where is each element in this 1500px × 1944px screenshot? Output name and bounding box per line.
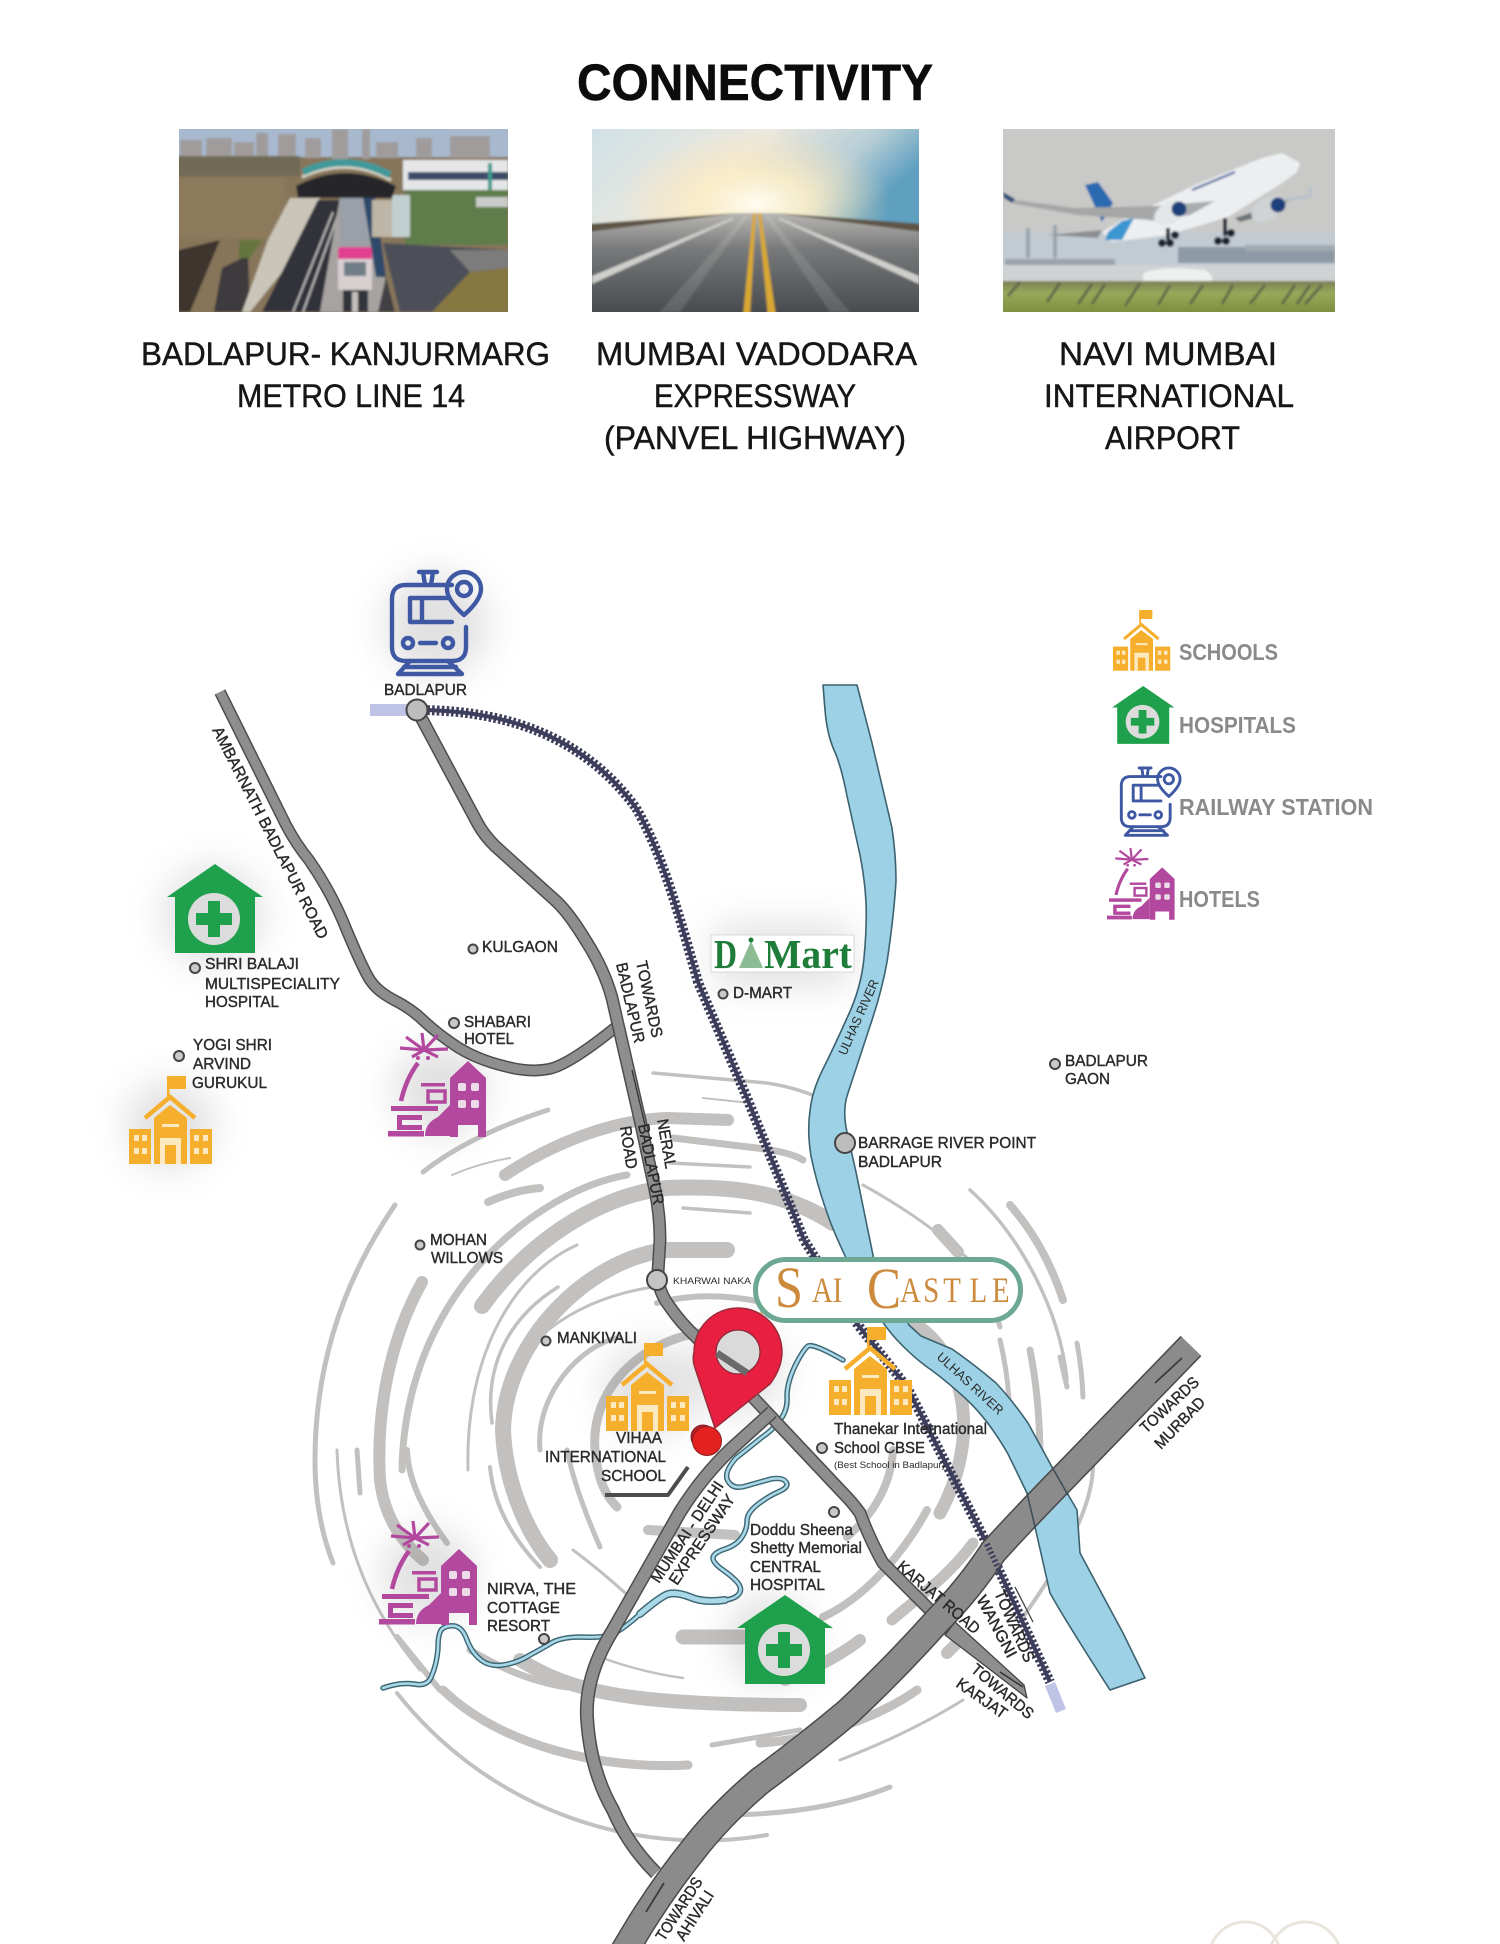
label: nirva cottage resort: COTTAGE bbox=[487, 1600, 560, 1617]
label: shri balaji hospital bbox=[190, 956, 340, 1011]
badge: sai castle bbox=[756, 1255, 1020, 1321]
label: central hospital: HOSPITAL bbox=[750, 1577, 825, 1594]
label: thanekar international school bbox=[817, 1421, 987, 1471]
label: mankivali: MANKIVALI bbox=[557, 1330, 637, 1347]
legend: schools: SCHOOLS bbox=[1179, 639, 1278, 665]
label: towards ahivali: AHIVALI bbox=[673, 1888, 718, 1944]
icon: vihaa school bbox=[606, 1343, 689, 1431]
label: shri balaji hospital: HOSPITAL bbox=[205, 994, 279, 1011]
road label: mumbai delhi expressway: MUMBAI - DELHI bbox=[648, 1478, 727, 1586]
icon: central hospital bbox=[737, 1595, 833, 1684]
legend: hospitals: HOSPITALS bbox=[1179, 712, 1296, 738]
label: mohan willows bbox=[416, 1232, 503, 1267]
road label: neral badlapur road: NERAL bbox=[653, 1118, 679, 1170]
river label: ulhas lower: ULHAS RIVER bbox=[934, 1349, 1007, 1418]
label: kharwai naka: KHARWAI NAKA bbox=[673, 1276, 752, 1287]
label: yogi shri arvind gurukul: GURUKUL bbox=[192, 1075, 267, 1092]
logo: dmart: D bbox=[714, 931, 737, 977]
road label: neral badlapur road bbox=[616, 1118, 679, 1206]
legend: railway station: RAILWAY STATION bbox=[1179, 794, 1373, 820]
label: vihaa international school bbox=[545, 1430, 666, 1485]
logo: dmart bbox=[711, 931, 854, 977]
label: vihaa international school: INTERNATIONAL bbox=[545, 1449, 666, 1466]
road label: towards badlapur bbox=[612, 959, 665, 1045]
caption: expressway bbox=[596, 336, 918, 456]
label: thanekar international school: Thanekar International bbox=[834, 1421, 987, 1438]
label: shri balaji hospital: SHRI BALAJI bbox=[205, 956, 299, 973]
legend: hotels bbox=[1107, 848, 1260, 920]
node: badlapur station bbox=[406, 700, 428, 720]
label: central hospital: Shetty Memorial bbox=[750, 1540, 862, 1557]
caption: airport: AIRPORT bbox=[1105, 420, 1240, 456]
label: central hospital: CENTRAL bbox=[750, 1559, 821, 1576]
label: towards wangni: TOWARDS bbox=[990, 1588, 1037, 1665]
label: towards murbad: TOWARDS bbox=[1137, 1374, 1203, 1437]
badge: sai castle: S bbox=[775, 1255, 803, 1320]
road label: karjat road: KARJAT ROAD bbox=[893, 1558, 983, 1638]
road label: neral badlapur road: ROAD bbox=[616, 1125, 640, 1170]
icon: shabari hotel bbox=[388, 1033, 486, 1137]
label: d-mart: D-MART bbox=[733, 985, 792, 1002]
node: barrage river point bbox=[835, 1133, 855, 1153]
label: badlapur: BADLAPUR bbox=[384, 682, 467, 699]
label: central hospital bbox=[750, 1507, 862, 1594]
label: shri balaji hospital: MULTISPECIALITY bbox=[205, 976, 340, 993]
road: neral badlapur and karjat road bbox=[417, 710, 1027, 1698]
label: towards karjat: KARJAT bbox=[953, 1675, 1010, 1723]
label: nirva cottage resort: RESORT bbox=[487, 1618, 550, 1635]
railway line ends bbox=[370, 704, 1066, 1713]
label: towards wangni bbox=[972, 1588, 1037, 1665]
label: kulgaon: KULGAON bbox=[482, 939, 558, 956]
ulhas river bbox=[809, 685, 1145, 1690]
title: CONNECTIVITY bbox=[577, 54, 933, 111]
label: towards karjat: TOWARDS bbox=[967, 1661, 1037, 1723]
legend: hospitals bbox=[1112, 686, 1296, 744]
small creek bbox=[383, 1346, 843, 1688]
caption: metro line: BADLAPUR- KANJURMARG bbox=[141, 336, 550, 372]
decorative corner rings bbox=[1209, 1922, 1341, 1944]
label: towards ahivali: TOWARDS bbox=[653, 1875, 707, 1944]
caption: metro line: METRO LINE 14 bbox=[237, 378, 465, 414]
road: mumbai delhi expressway bbox=[587, 1412, 772, 1873]
legend: railway station bbox=[1121, 768, 1373, 835]
label: mohan willows: MOHAN bbox=[430, 1232, 487, 1249]
badge: sai castle: AI bbox=[812, 1271, 842, 1311]
icon: yogi shri gurukul school bbox=[129, 1076, 212, 1164]
label: shabari hotel bbox=[449, 1014, 531, 1048]
label: badlapur gaon: BADLAPUR bbox=[1065, 1053, 1148, 1070]
road: vihaa side road bbox=[605, 1467, 688, 1495]
label: nirva cottage resort: NIRVA, THE bbox=[487, 1581, 576, 1598]
label: vihaa international school: VIHAA bbox=[616, 1430, 662, 1447]
label: thanekar international school: (Best School in Badlapur) bbox=[834, 1460, 945, 1471]
photo: airport bbox=[999, 125, 1339, 316]
icon: nirva resort bbox=[379, 1521, 477, 1625]
caption: metro line bbox=[141, 336, 550, 414]
badge: sai castle: ASTLE bbox=[900, 1271, 1010, 1311]
caption: airport: INTERNATIONAL bbox=[1044, 378, 1294, 414]
label: barrage river point: BARRAGE RIVER POINT bbox=[858, 1135, 1036, 1152]
highway bbox=[610, 1346, 1191, 1944]
label: nirva cottage resort bbox=[487, 1581, 576, 1644]
legend bbox=[1107, 610, 1373, 920]
label: towards wangni: WANGNI bbox=[972, 1593, 1019, 1661]
icon: badlapur station bbox=[392, 572, 481, 674]
soft shadows behind icons bbox=[126, 573, 850, 1684]
label: vihaa international school: SCHOOL bbox=[601, 1468, 666, 1485]
concentric ring background bbox=[315, 1073, 1093, 1841]
label: shabari hotel: SHABARI bbox=[464, 1014, 531, 1031]
label: badlapur gaon bbox=[1050, 1053, 1148, 1088]
photo: metro line bbox=[175, 125, 512, 316]
label: barrage river point: BADLAPUR bbox=[858, 1154, 942, 1171]
node: kharwai naka bbox=[647, 1270, 667, 1290]
label: yogi shri arvind gurukul: YOGI SHRI bbox=[193, 1037, 272, 1054]
label: thanekar international school: School CBSE bbox=[834, 1440, 925, 1457]
caption: airport bbox=[1044, 336, 1294, 456]
icon: shri balaji hospital bbox=[167, 864, 263, 953]
road label: mumbai delhi expressway: EXPRESSWAY bbox=[666, 1491, 739, 1588]
caption: expressway: EXPRESSWAY bbox=[654, 378, 856, 414]
label: barrage river point bbox=[858, 1135, 1036, 1171]
label: towards murbad: MURBAD bbox=[1152, 1394, 1209, 1453]
label: yogi shri arvind gurukul: ARVIND bbox=[193, 1056, 251, 1073]
road: ambarnath badlapur bbox=[220, 692, 616, 1070]
label: yogi shri arvind gurukul bbox=[174, 1037, 272, 1092]
label: badlapur gaon: GAON bbox=[1065, 1071, 1110, 1088]
caption: expressway: (PANVEL HIGHWAY) bbox=[604, 420, 906, 456]
logo: dmart: Mart bbox=[764, 931, 852, 977]
location pin bbox=[691, 1308, 782, 1456]
road label: towards badlapur: BADLAPUR bbox=[612, 961, 647, 1045]
icon: thanekar school bbox=[829, 1327, 912, 1415]
caption: expressway: MUMBAI VADODARA bbox=[596, 336, 918, 372]
legend: hotels: HOTELS bbox=[1179, 886, 1260, 912]
label: mohan willows: WILLOWS bbox=[431, 1250, 503, 1267]
road label: ambarnath badlapur road: AMBARNATH BADLAPUR ROAD bbox=[208, 724, 331, 942]
road label: towards badlapur: TOWARDS bbox=[632, 959, 665, 1039]
road label: neral badlapur road: BADLAPUR bbox=[634, 1123, 666, 1206]
caption: airport: NAVI MUMBAI bbox=[1059, 336, 1277, 372]
river label: ulhas upper: ULHAS RIVER bbox=[835, 977, 882, 1057]
legend: schools bbox=[1113, 610, 1278, 671]
photo: expressway bbox=[588, 125, 923, 316]
label: central hospital: Doddu Sheena bbox=[750, 1522, 853, 1539]
badge: sai castle: C bbox=[867, 1256, 901, 1321]
railway line bbox=[408, 710, 1050, 1682]
label: shabari hotel: HOTEL bbox=[464, 1031, 514, 1048]
